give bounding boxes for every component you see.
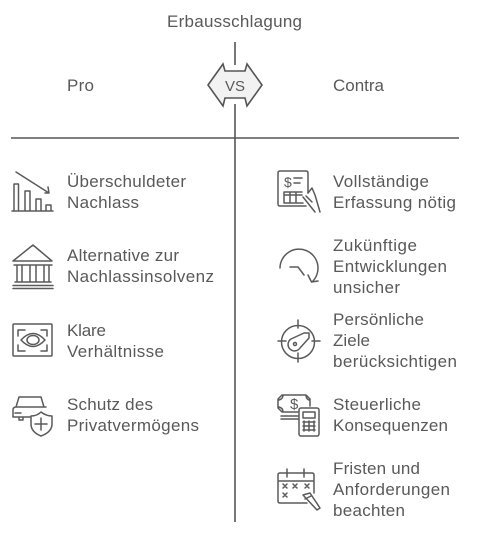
text: Persönliche Ziele berücksichtigen: Ziele [333, 331, 370, 350]
text: Fristen und Anforderungen beachten [333, 459, 450, 520]
item: deadlines and requirements [278, 459, 450, 520]
text: Klare Verhältnisse: Verhältnisse [67, 342, 164, 361]
text: Persönliche Ziele berücksichtigen [333, 310, 457, 371]
icon: clockwise arrow dial [280, 249, 318, 282]
icon: eye in frame [13, 324, 52, 356]
text: Persönliche Ziele berücksichtigen: berücksichtigen [333, 352, 457, 371]
text: Persönliche Ziele berücksichtigen: Persönliche [333, 310, 424, 329]
item: protection of private assets [13, 395, 199, 436]
text: Überschuldeter Nachlass: Nachlass [67, 193, 139, 212]
text: Fristen und Anforderungen beachten: beachten [333, 501, 405, 520]
text: Alternative zur Nachlassinsolvenz: Alternative zur [67, 246, 179, 265]
panel: Contra items [278, 171, 457, 520]
icon: calendar with pen [278, 469, 320, 510]
title: Erbausschlagung [167, 12, 302, 31]
item: clear circumstances [13, 321, 164, 361]
icon: banknote with calculator [278, 395, 319, 436]
panel: Pro items [12, 172, 214, 436]
text: Steuerliche Konsequenzen: Steuerliche [333, 395, 421, 414]
text: Schutz des Privatvermögens [67, 395, 199, 435]
icon: banknote with calculator: $ [290, 396, 299, 413]
text: Schutz des Privatvermögens: Privatvermögens [67, 416, 199, 435]
item: personal goals [278, 310, 457, 371]
text: Vollständige Erfassung nötig: Erfassung nötig [333, 193, 456, 212]
icon: bank building [13, 245, 53, 288]
text: Zukünftige Entwicklungen unsicher [333, 236, 447, 297]
text: Fristen und Anforderungen beachten: Fristen und [333, 459, 420, 478]
icon: car with shield [13, 397, 52, 436]
text: Zukünftige Entwicklungen unsicher: Entwicklungen [333, 257, 447, 276]
item: uncertain future developments [280, 236, 447, 297]
icon: VS badge: VS [225, 78, 245, 95]
icon: falling bar chart [12, 172, 53, 211]
text: Vollständige Erfassung nötig [333, 172, 456, 212]
icon: document with hand [278, 171, 320, 212]
item: full inventory needed [278, 171, 456, 212]
icon: document with hand: $ [284, 174, 292, 190]
text: Vollständige Erfassung nötig: Vollständige [333, 172, 429, 191]
text: Zukünftige Entwicklungen unsicher: unsicher [333, 278, 400, 297]
item: overindebted estate [12, 172, 186, 212]
heading: Pro: Pro [67, 76, 94, 95]
text: Steuerliche Konsequenzen [333, 395, 448, 435]
text: Überschuldeter Nachlass [67, 172, 186, 212]
item: alternative to insolvency [13, 245, 214, 288]
text: Alternative zur Nachlassinsolvenz: Nachlassinsolvenz [67, 267, 214, 286]
text: Fristen und Anforderungen beachten: Anforderungen [333, 480, 450, 499]
icon: VS badge [208, 64, 262, 106]
text: Zukünftige Entwicklungen unsicher: Zukünftige [333, 236, 417, 255]
item: tax consequences [278, 395, 448, 436]
text: Klare Verhältnisse [67, 321, 164, 361]
heading: Contra: Contra [333, 76, 385, 95]
text: Schutz des Privatvermögens: Schutz des [67, 395, 153, 414]
text: Klare Verhältnisse: Klare [67, 321, 106, 340]
text: Alternative zur Nachlassinsolvenz [67, 246, 214, 286]
icon: target with key [278, 320, 320, 362]
text: Überschuldeter Nachlass: Überschuldeter [67, 172, 186, 191]
text: Steuerliche Konsequenzen: Konsequenzen [333, 416, 448, 435]
